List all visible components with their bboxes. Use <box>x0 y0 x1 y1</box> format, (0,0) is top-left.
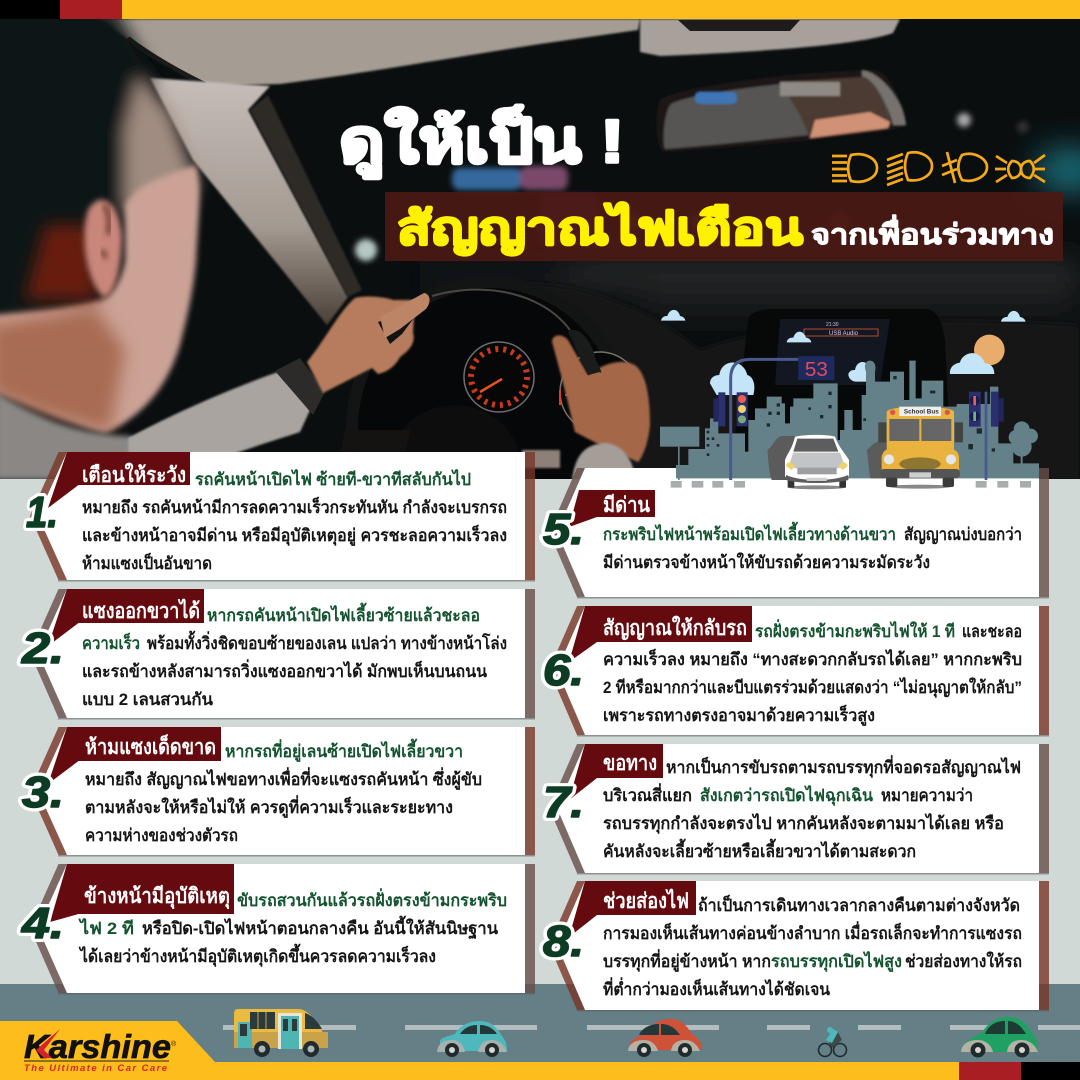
card 5 text <box>603 521 1022 572</box>
card 4 number: 4. <box>21 899 64 948</box>
card 8 number: 8. <box>543 917 584 966</box>
card 6 text <box>603 619 1022 727</box>
road lane dashes <box>223 1025 1080 1030</box>
card 3 text: หมายถึง สัญญาณไฟขอทางเพื่อที่จะแซงรถคันหน้า ซึ่งผู้ขับ <box>85 767 482 791</box>
left hand <box>307 293 430 393</box>
card 3 text: ตามหลังจะให้หรือไม่ให้ ควรดูที่ความเร็วและระยะทาง <box>85 795 453 819</box>
card 7 text: สังเกตว่ารถเปิดไฟฉุกเฉิน <box>700 785 873 806</box>
card 4 heading <box>50 864 234 922</box>
logo: Karshine: The Ultimate in Car Care <box>24 1063 168 1074</box>
title banner: จากเพื่อนร่วมทาง <box>811 214 1054 250</box>
card 5 heading <box>569 490 655 527</box>
right gauge <box>559 351 630 424</box>
traffic light and speed sign <box>713 356 834 480</box>
card 8 text: ถ้าเป็นการเดินทางเวลากลางคืนตามต่างจังหวัด <box>698 893 1020 915</box>
card 7 text: บริเวณสี่แยก <box>603 783 692 805</box>
photo: driver at night <box>0 19 1080 479</box>
steering wheel and dashboard <box>576 302 1078 478</box>
card 6 number: 6. <box>543 646 584 695</box>
card 2 text <box>82 602 507 709</box>
card 1 number: 1. <box>26 488 58 537</box>
building windows <box>707 376 995 456</box>
card 1 heading: เตือนให้ระวัง <box>82 462 186 487</box>
card 6 heading: สัญญาณให้กลับรถ <box>603 615 747 641</box>
card 2 text: ความเร็ว <box>82 631 140 653</box>
clouds and sun <box>661 310 1026 395</box>
card 3 number: 3. <box>22 768 64 817</box>
title banner <box>385 192 1063 261</box>
card 2 text: หากรถคันหน้าเปิดไฟเลี้ยวซ้ายแล้วชะลอ <box>207 602 480 625</box>
panel: card 8 <box>543 881 1049 1012</box>
title banner: สัญญาณไฟเตือน <box>397 202 804 255</box>
panel: card 2 <box>21 589 535 720</box>
card 8 text: การมองเห็นเส้นทางค่อนข้างลำบาก เมื่อรถเล็กจะทำการแซงรถ <box>603 921 1022 943</box>
panel: card 1 <box>26 452 535 582</box>
card 2 number: 2. <box>21 624 64 673</box>
icon: cyclist <box>818 1027 846 1056</box>
card 6 text: 2 ทีหรือมากกว่าและบีบแตรร่วมด้วยแสดงว่า “ไม่อนุญาตให้กลับ” <box>603 677 1022 698</box>
panel: card 4 <box>21 864 535 994</box>
card 5 heading: มีด่าน <box>603 493 651 517</box>
rear-view mirror <box>656 70 906 152</box>
pedestrian light <box>969 392 1004 480</box>
card 1 text: หมายถึง รถคันหน้ามีการลดความเร็วกระทันหัน กำลังจะเบรกรถ <box>82 495 507 517</box>
panel: card 7 <box>543 744 1049 874</box>
card 3 text: หากรถที่อยู่เลนซ้ายเปิดไฟเลี้ยวขวา <box>225 738 463 763</box>
face and neck <box>0 165 199 433</box>
card 6 text: และชะลอ <box>962 622 1022 641</box>
icon: minibus <box>234 1009 328 1057</box>
headlight icons <box>832 152 1045 185</box>
card 1 heading <box>48 452 190 508</box>
logo: Karshine: Karshine <box>24 1028 171 1065</box>
shirt <box>0 393 134 479</box>
card 6 heading <box>569 606 752 662</box>
card 6 number: 6. <box>543 646 584 695</box>
card 8 number: 8. <box>543 917 584 966</box>
card 8 text: ที่ต่ำกว่ามองเห็นเส้นทางได้ชัดเจน <box>603 977 830 999</box>
road band <box>0 984 1080 1062</box>
right hand <box>552 335 650 462</box>
card 1 text <box>82 469 507 573</box>
road dashes <box>671 481 1031 488</box>
panel: card 5 <box>543 468 1049 598</box>
card 3 number: 3. <box>22 768 64 817</box>
card 1 text: ห้ามแซงเป็นอันขาด <box>82 551 212 573</box>
card 2 text: และรถข้างหลังสามารถวิ่งแซงออกขวาได้ มักพบเห็นบนถนน <box>82 659 487 681</box>
traffic light and speed sign: 53 <box>805 358 828 381</box>
card 1 text: และข้างหน้าอาจมีด่าน หรือมีอุบัติเหตุอยู่ ควรชะลอความเร็วลง <box>82 523 507 547</box>
card 5 number: 5. <box>543 505 584 554</box>
bottom colour bar <box>0 1021 1080 1080</box>
card 6 text: เพราะรถทางตรงอาจมาด้วยความเร็วสูง <box>603 703 875 727</box>
panel: card 6 <box>543 606 1049 736</box>
card 8 heading <box>569 881 696 937</box>
card 7 heading: ขอทาง <box>603 752 657 775</box>
card 5 number: 5. <box>543 505 584 554</box>
card 2 heading <box>48 589 204 646</box>
infotainment screen: USB Audio <box>829 331 859 337</box>
card 7 text: หมายความว่า <box>881 786 973 805</box>
card 3 heading: ห้ามแซงเด็ดขาด <box>85 733 216 759</box>
card 8 text: ช่วยส่องทางให้รถ <box>905 951 1022 971</box>
card 7 text: คันหลังจะเลี้ยวซ้ายหรือเลี้ยวขวาได้ตามสะดวก <box>603 838 916 861</box>
speedometer <box>464 342 534 412</box>
card 8 text: รถบรรทุกเปิดไฟสูง <box>771 951 902 973</box>
card 4 number: 4. <box>21 899 64 948</box>
console details <box>340 430 402 452</box>
icon: teal car <box>437 1021 507 1057</box>
panel: card 3 <box>22 727 535 856</box>
card 4 text: ได้เลยว่าข้างหน้ามีอุบัติเหตุเกิดขึ้นควรลดความเร็วลง <box>78 943 436 967</box>
card 7 number: 7. <box>543 778 584 827</box>
card 4 text: ไฟ 2 ที <box>78 918 134 938</box>
white car <box>767 435 849 489</box>
card 1 number: 1. <box>26 488 58 537</box>
infotainment screen: 21:30 <box>826 322 839 328</box>
card 7 number: 7. <box>543 778 584 827</box>
headliner and sun visor <box>100 19 640 86</box>
card 4 heading: ข้างหน้ามีอุบัติเหตุ <box>84 884 230 910</box>
card 3 text <box>85 738 482 845</box>
card 4 text: ขับรถสวนกันแล้วรถฝั่งตรงข้ามกระพริบ <box>237 888 507 910</box>
card 7 text: หากเป็นการขับรถตามรถบรรทุกที่จอดรอสัญญาณไฟ <box>666 755 1021 778</box>
card 4 text: หรือปิด-เปิดไฟหน้าตอนกลางคืน อันนี้ให้สันนิษฐาน <box>142 915 498 940</box>
card 2 text: แบบ 2 เลนสวนกัน <box>82 690 213 709</box>
infotainment screen <box>735 309 948 452</box>
card 1 text: รถคันหน้าเปิดไฟ ซ้ายที-ขวาทีสลับกันไป <box>195 469 471 489</box>
card 7 text: รถบรรทุกกำลังจะตรงไป หากคันหลังจะตามมาได้เลย หรือ <box>603 813 1004 834</box>
card 3 heading <box>48 727 221 784</box>
skyline <box>676 361 1039 478</box>
card 2 number: 2. <box>21 624 64 673</box>
card 2 heading: แซงออกขวาได้ <box>82 598 200 623</box>
top colour bar <box>0 0 1080 19</box>
card 5 text: มีด่านตรวจข้างหน้าให้ขับรถด้วยความระมัดระวัง <box>603 552 930 572</box>
card 6 text: ความเร็วลง หมายถึง “ทางสะดวกกลับรถได้เลย” หากกะพริบ <box>603 647 1022 669</box>
card 3 text: ความห่างของช่วงตัวรถ <box>85 826 238 845</box>
card 8 heading: ช่วยส่องไฟ <box>603 888 689 913</box>
logo: Karshine: ® <box>171 1040 177 1048</box>
card 7 text <box>603 755 1021 861</box>
city illustration <box>660 310 1039 489</box>
card 2 text: พร้อมทั้งวิ่งชิดขอบซ้ายของเลน แปลว่า ทางข้างหน้าโล่ง <box>147 630 507 653</box>
school bus: School Bus <box>904 409 939 416</box>
title: ดูให้เป็น ! <box>339 105 624 179</box>
card 6 text: รถฝั่งตรงข้ามกะพริบไฟให้ 1 ที <box>755 619 955 641</box>
school bus <box>867 407 963 489</box>
card 7 heading <box>569 744 663 800</box>
card 5 text: สัญญาณบ่งบอกว่า <box>904 525 1022 545</box>
card 4 text <box>78 888 507 967</box>
billboard <box>660 427 699 480</box>
card 5 text: กระพริบไฟหน้าพร้อมเปิดไฟเลี้ยวทางด้านขวา <box>603 521 896 544</box>
hair <box>22 19 208 309</box>
right sleeve <box>572 443 636 480</box>
watch <box>275 358 325 415</box>
card 8 text <box>603 893 1022 999</box>
tree <box>1009 421 1038 467</box>
card 8 text: บรรทุกที่อยู่ข้างหน้า หาก <box>603 949 771 973</box>
icon: red car <box>628 1019 702 1057</box>
A-pillar <box>150 78 348 325</box>
icon: green car <box>961 1017 1038 1058</box>
